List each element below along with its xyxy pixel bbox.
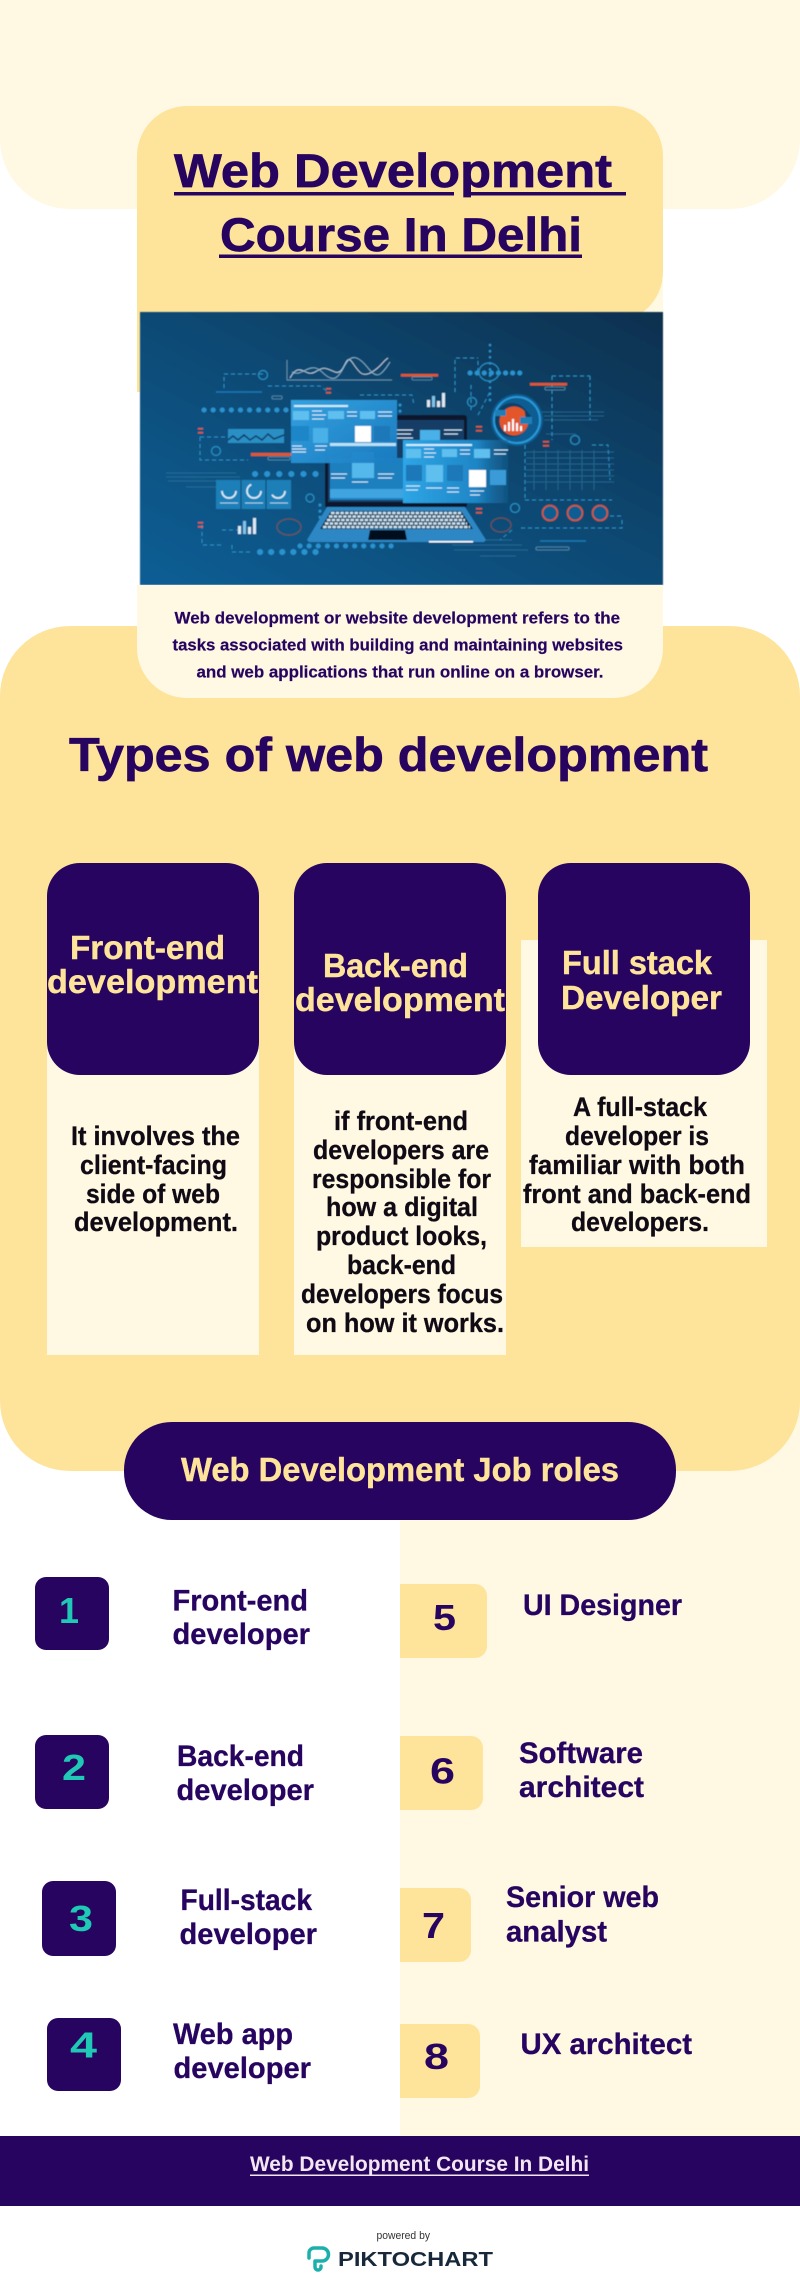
panel: types of web development background bbox=[0, 626, 800, 1471]
right overlapping browser window bbox=[403, 440, 508, 503]
card text: front-end: side of web bbox=[86, 1179, 220, 1209]
card text: back-end: on how it works. bbox=[306, 1308, 504, 1338]
job role 3: 3 bbox=[69, 1898, 93, 1939]
top cream banner bbox=[0, 0, 800, 209]
job role 2: 2 bbox=[62, 1747, 86, 1788]
left overlapping browser window bbox=[291, 400, 397, 463]
circular donut chart bbox=[491, 394, 543, 446]
powered by piktochart logo bbox=[309, 2230, 493, 2271]
heading pill: job roles bbox=[124, 1422, 676, 1520]
card text: full stack: developers. bbox=[571, 1207, 709, 1237]
card text: back-end: if front-end bbox=[334, 1106, 468, 1136]
job role 7 bbox=[400, 1881, 659, 1962]
job role 3 bbox=[42, 1881, 317, 1956]
job role 6: Software bbox=[519, 1737, 643, 1770]
job role 1: 1 bbox=[59, 1590, 79, 1631]
card text: full stack: A full-stack bbox=[573, 1092, 708, 1122]
footer bar: Web Development Course In Delhi bbox=[250, 2153, 589, 2176]
small outlined circles bbox=[212, 363, 580, 512]
card title: full stack bbox=[561, 944, 722, 1016]
mini bar chart right bbox=[427, 393, 445, 407]
job role 3: Full-stack bbox=[180, 1884, 312, 1917]
title: Course In Delhi bbox=[220, 208, 582, 261]
lower right cream background bbox=[400, 1400, 800, 2140]
dashed circuit connectors bbox=[200, 358, 650, 552]
card title: back-end: development bbox=[295, 981, 505, 1018]
card text: back-end: how a digital bbox=[326, 1192, 478, 1222]
card text: front-end bbox=[71, 1121, 240, 1237]
outlined pill labels bbox=[268, 377, 569, 550]
panel: front-end development bbox=[47, 863, 259, 1355]
panel: description card bbox=[137, 585, 663, 698]
job role 6: architect bbox=[519, 1771, 644, 1804]
panel: title card bbox=[137, 106, 663, 392]
card text: back-end bbox=[301, 1106, 504, 1338]
mini bar chart left bbox=[238, 518, 256, 534]
card text: full stack: front and back-end bbox=[523, 1179, 751, 1209]
panel: full stack developer bbox=[521, 863, 767, 1247]
job role 2 bbox=[35, 1735, 314, 1809]
powered by piktochart logo: PIKTOCHART bbox=[338, 2249, 493, 2271]
description text bbox=[172, 610, 623, 682]
description text: Web development or website development refers to the bbox=[174, 610, 620, 628]
job role 1: Front-end bbox=[172, 1584, 308, 1618]
card text: front-end: client-facing bbox=[80, 1150, 227, 1180]
job role 4 bbox=[47, 2018, 311, 2091]
faint text blocks and grid lines bbox=[166, 412, 614, 556]
dotted data lines bbox=[204, 345, 520, 552]
job role 2: Back-end bbox=[177, 1740, 304, 1773]
card text: full stack: familiar with both bbox=[529, 1150, 745, 1180]
three orange status rings bbox=[542, 506, 608, 520]
footer bar bbox=[0, 2136, 800, 2206]
job role 2: developer bbox=[176, 1774, 314, 1807]
card title: front-end bbox=[47, 929, 258, 1000]
description text: tasks associated with building and maintaining websites bbox=[172, 636, 623, 654]
card title: back-end bbox=[295, 947, 505, 1018]
card title: back-end: Back-end bbox=[323, 947, 468, 984]
card text: front-end: It involves the bbox=[71, 1121, 240, 1151]
job role 1 bbox=[35, 1577, 310, 1651]
job role 7: 7 bbox=[422, 1905, 445, 1946]
card text: back-end: responsible for bbox=[312, 1164, 491, 1194]
job role 7: Senior web bbox=[506, 1881, 659, 1914]
orange bars bbox=[198, 374, 567, 528]
card title: full stack: Developer bbox=[561, 979, 722, 1016]
laptop keyboard base bbox=[307, 507, 486, 542]
card title: front-end: development bbox=[47, 963, 258, 1000]
job role 8: 8 bbox=[424, 2036, 449, 2077]
card title: front-end: Front-end bbox=[70, 929, 225, 966]
panel: back-end development bbox=[294, 863, 506, 1355]
description text: and web applications that run online on a browser. bbox=[196, 664, 604, 682]
title: Web Development bbox=[174, 144, 612, 197]
sparkline panel bbox=[228, 429, 284, 443]
powered by piktochart logo: powered by bbox=[376, 2230, 430, 2242]
job role 8: UX architect bbox=[520, 2028, 692, 2061]
job role 4: 4 bbox=[70, 2024, 97, 2066]
job role 5 bbox=[400, 1584, 682, 1658]
job role 6 bbox=[400, 1736, 644, 1810]
job role 7: analyst bbox=[506, 1916, 607, 1948]
card title: full stack: Full stack bbox=[562, 944, 713, 981]
card text: back-end: developers focus bbox=[301, 1279, 503, 1309]
card text: back-end: developers are bbox=[313, 1135, 489, 1165]
job role 3: developer bbox=[180, 1918, 317, 1951]
job role 8 bbox=[400, 2024, 692, 2098]
card text: full stack bbox=[523, 1092, 751, 1237]
job role 5: UI Designer bbox=[523, 1589, 682, 1622]
line chart bbox=[287, 358, 392, 380]
blue rule lines bbox=[216, 392, 586, 541]
icon: piktochart mark bbox=[309, 2248, 328, 2270]
title bbox=[174, 144, 626, 261]
job role 5: 5 bbox=[433, 1597, 456, 1638]
dashboard gauge cards bbox=[216, 480, 291, 509]
job role 4: Web app bbox=[173, 2018, 293, 2051]
heading pill: job roles: Web Development Job roles bbox=[181, 1451, 619, 1488]
card text: back-end: back-end bbox=[347, 1250, 456, 1280]
job role 4: developer bbox=[174, 2052, 311, 2085]
job role 1: developer bbox=[172, 1618, 310, 1651]
speech bubbles bbox=[277, 518, 511, 535]
card text: front-end: development. bbox=[74, 1207, 238, 1237]
heading: types of web development: Types of web development bbox=[69, 728, 708, 781]
card text: back-end: product looks, bbox=[316, 1221, 487, 1251]
laptop screen bbox=[325, 415, 467, 508]
card text: full stack: developer is bbox=[565, 1121, 709, 1151]
job role 6: 6 bbox=[430, 1750, 455, 1792]
illustration: laptop with web dashboards bbox=[140, 312, 663, 585]
